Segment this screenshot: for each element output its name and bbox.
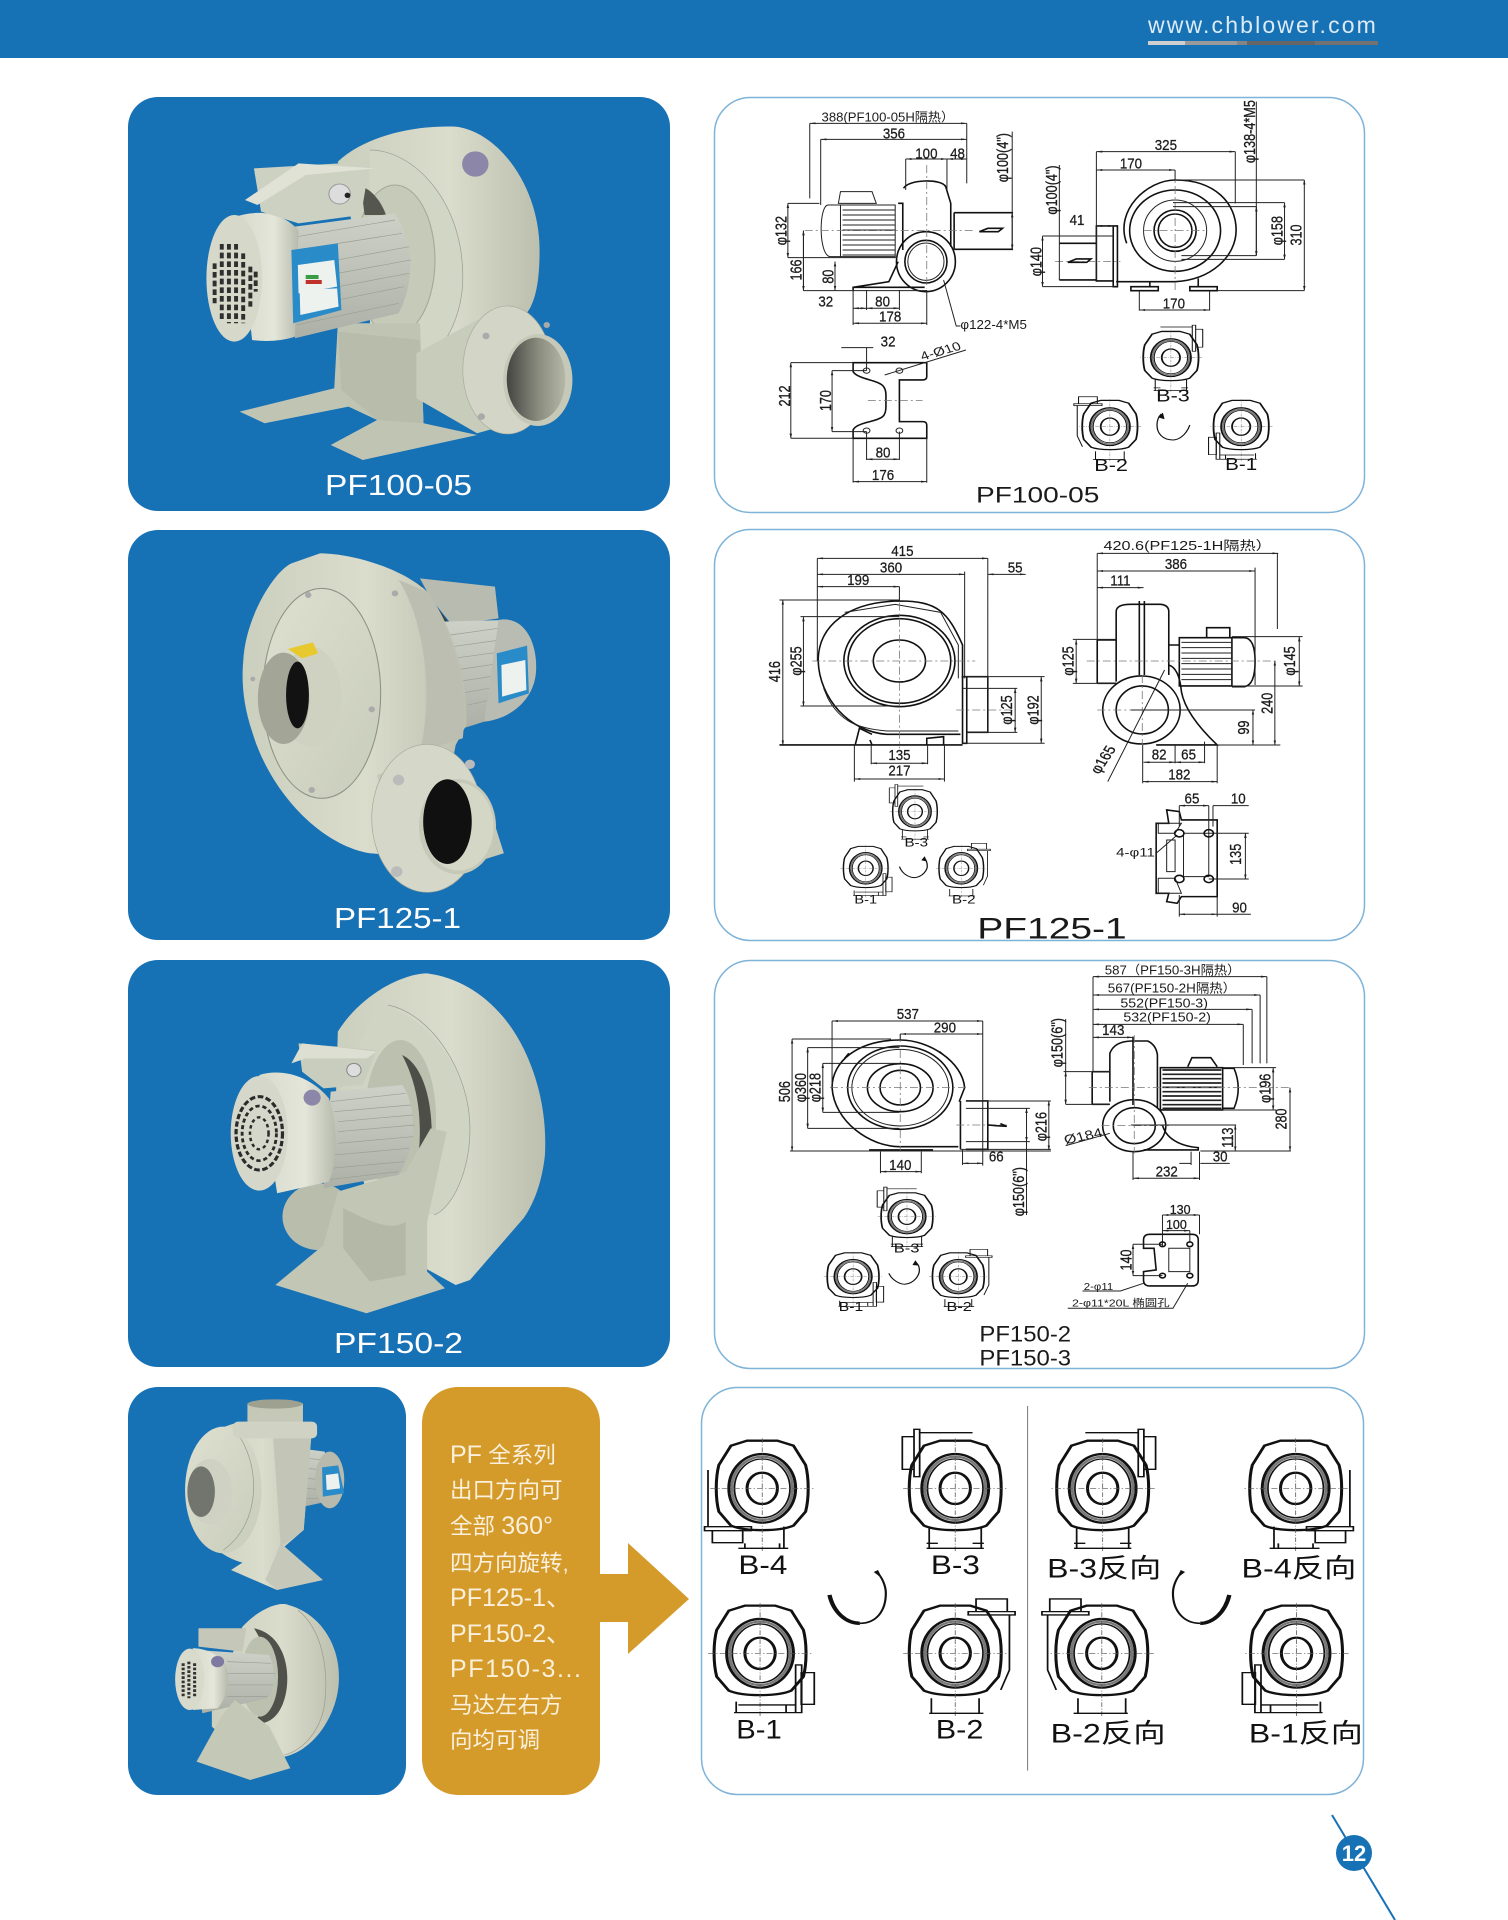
base plate drawing: 170 — [817, 390, 835, 411]
blower photo: outlet up — [185, 1399, 344, 1590]
rotation positions B-1 to B-3: B-2 — [947, 1300, 972, 1314]
front view dimensions: 170 — [1120, 155, 1142, 171]
front view dimensions — [777, 1005, 1051, 1216]
front view dimensions: 360 — [880, 559, 902, 575]
side view dimensions: 388(PF100-05H隔热） — [822, 110, 954, 125]
side view dimensions: 82 — [1152, 746, 1167, 762]
panel: PF125-1 photo — [128, 530, 670, 940]
product name: PF150-2 — [334, 1328, 463, 1360]
base plate drawing — [777, 333, 966, 483]
base plate drawing: 212 — [777, 385, 794, 407]
base plate drawing: 176 — [872, 466, 894, 483]
side view dimensions — [1049, 963, 1291, 1180]
url underline bar — [1148, 41, 1378, 45]
base plate drawing: 140 — [1118, 1249, 1136, 1271]
front view dimensions: φ140 — [1028, 247, 1046, 276]
front view dimensions: φ158 — [1269, 216, 1287, 245]
front view dimensions: 325 — [1155, 136, 1177, 153]
divider — [1027, 1406, 1029, 1771]
front view dimensions: φ255 — [788, 646, 806, 676]
side view dimensions: 232 — [1156, 1163, 1178, 1180]
page number badge: 12 — [1342, 1841, 1366, 1866]
side view dimensions: 356 — [883, 125, 905, 141]
callout text: PF150-3... — [450, 1655, 581, 1683]
base plate drawing: 32 — [881, 333, 896, 350]
side view dimensions — [773, 110, 1027, 332]
rotation positions B-1 to B-3 — [824, 1187, 992, 1314]
front view dimensions: 135 — [888, 746, 911, 763]
standard positions B-1 to B-4: B-4 — [738, 1550, 787, 1580]
side view dimensions: Ø184 — [1062, 1126, 1105, 1148]
panel: PF150 technical drawing — [714, 960, 1364, 1371]
drawing title: PF150-2 — [979, 1322, 1071, 1347]
side view dimensions: 166 — [788, 259, 806, 281]
front view dimensions: 199 — [847, 571, 870, 588]
base plate drawing: 2-φ11 — [1084, 1282, 1113, 1293]
front view dimensions: φ150(6") — [1011, 1167, 1028, 1216]
side view dimensions: 80 — [820, 270, 838, 284]
side view dimensions: 48 — [950, 145, 965, 161]
arrow to rotation diagram — [596, 1543, 689, 1654]
page number badge — [1332, 1815, 1395, 1920]
standard positions B-1 to B-4: B-2 — [936, 1714, 983, 1744]
rotation positions B-1 to B-3: B-3 — [894, 1242, 919, 1256]
drawing title: PF150-3 — [979, 1346, 1071, 1371]
panel: PF100-05 technical drawing — [714, 98, 1364, 512]
standard positions B-1 to B-4 — [705, 1429, 1015, 1744]
side view dimensions: φ145 — [1282, 646, 1299, 676]
side view dimensions: 143 — [1102, 1021, 1125, 1038]
front view dimensions: 290 — [934, 1019, 956, 1035]
side view dimensions — [1060, 539, 1303, 783]
reversed positions: B-1反向 — [1249, 1719, 1363, 1749]
base plate drawing — [1116, 790, 1251, 917]
side view dimensions: φ125 — [1060, 646, 1078, 676]
callout text — [450, 1441, 581, 1753]
side view dimensions: φ122-4*M5 — [960, 318, 1027, 332]
website url: www.chblower.com — [1147, 12, 1378, 38]
rotation positions B-1 to B-3 — [840, 785, 990, 906]
callout text: PF150-2、 — [450, 1620, 571, 1648]
header band — [0, 0, 1508, 58]
panel: gold callout — [422, 1387, 689, 1795]
side view dimensions: 567(PF150-2H隔热） — [1108, 981, 1236, 996]
side view dimensions: φ196 — [1257, 1074, 1275, 1103]
side view dimensions: 99 — [1235, 721, 1253, 735]
front view dimensions — [767, 542, 1045, 782]
base plate drawing: 130 — [1170, 1203, 1191, 1217]
base plate drawing: 80 — [876, 444, 891, 461]
front view dimensions: φ125 — [998, 695, 1016, 725]
front view dimensions — [1028, 100, 1306, 311]
base plate drawing: 10 — [1231, 790, 1246, 806]
front view dimensions: φ360 — [793, 1073, 810, 1102]
panel: PF150-2 photo — [128, 960, 670, 1367]
side view dimensions: 111 — [1110, 572, 1131, 589]
side view dimensions: φ100(4") — [995, 133, 1012, 182]
front view outline — [779, 587, 1013, 748]
front view dimensions: 416 — [767, 661, 784, 682]
side view dimensions: 30 — [1213, 1148, 1228, 1165]
side view dimensions: 32 — [818, 293, 833, 310]
callout text: 向均可调 — [450, 1728, 540, 1753]
front view dimensions: 41 — [1070, 211, 1085, 228]
base plate drawing: 90 — [1232, 899, 1247, 916]
side view dimensions: 552(PF150-3) — [1120, 997, 1208, 1011]
base plate drawing: 4-φ11 — [1116, 846, 1155, 859]
drawing title: PF125-1 — [977, 912, 1127, 945]
side view outline — [1087, 601, 1278, 745]
front view dimensions: φ192 — [1025, 695, 1043, 725]
front view outline — [1055, 170, 1236, 291]
rotation positions B-1 to B-3: B-1 — [839, 1300, 863, 1314]
front view dimensions: 170 — [1163, 295, 1185, 311]
panel: PF100-05 photo — [128, 97, 670, 511]
rotation positions B-1 to B-3: B-2 — [952, 893, 976, 906]
rotation positions B-1 to B-3: B-2 — [1094, 455, 1128, 475]
side view dimensions: φ150(6") — [1049, 1018, 1067, 1067]
side view dimensions: 182 — [1168, 766, 1191, 782]
front view dimensions: φ216 — [1033, 1112, 1051, 1141]
blower photo PF150-2 — [231, 973, 545, 1313]
front view dimensions: φ218 — [807, 1073, 825, 1102]
side view dimensions: 65 — [1181, 746, 1196, 762]
side view dimensions: 100 — [915, 145, 938, 161]
base plate drawing: 65 — [1185, 790, 1200, 806]
rotation positions B-1 to B-3: B-3 — [904, 836, 928, 849]
callout text: 出口方向可 — [450, 1478, 563, 1503]
callout text: 全部 360° — [450, 1512, 553, 1540]
side view dimensions: 587（PF150-3H隔热） — [1105, 963, 1240, 978]
blower photo PF125-1 — [243, 553, 536, 892]
side view dimensions: φ165 — [1087, 744, 1120, 776]
front view dimensions: 310 — [1288, 224, 1306, 246]
front view dimensions: 140 — [889, 1156, 912, 1173]
base plate drawing — [1068, 1203, 1200, 1309]
standard positions B-1 to B-4: B-1 — [736, 1714, 782, 1744]
rotation positions B-1 to B-3: B-1 — [1225, 454, 1257, 474]
base plate drawing: 100 — [1166, 1218, 1187, 1232]
front view dimensions: φ100(4") — [1044, 165, 1062, 215]
rotation positions B-1 to B-3: B-3 — [1156, 386, 1190, 406]
standard positions B-1 to B-4: B-3 — [931, 1550, 980, 1580]
side view dimensions: φ132 — [773, 216, 791, 245]
front view dimensions: 415 — [891, 542, 914, 559]
panel: outlet rotation positions — [702, 1388, 1364, 1794]
front view dimensions: φ138-4*M5 — [1242, 100, 1260, 163]
drawing title — [979, 1322, 1071, 1371]
rotation arrow, standard — [829, 1570, 886, 1623]
side view dimensions: 420.6(PF125-1H隔热） — [1104, 539, 1272, 554]
side view dimensions: 113 — [1220, 1128, 1238, 1148]
front view dimensions: 55 — [1008, 559, 1023, 575]
side view dimensions: 532(PF150-2) — [1123, 1011, 1211, 1025]
panel: two blower photos — [128, 1387, 406, 1795]
drawing title: PF100-05 — [976, 483, 1099, 508]
reversed positions: B-2反向 — [1051, 1719, 1166, 1749]
side view dimensions: 80 — [875, 293, 890, 310]
reversed positions — [1042, 1429, 1363, 1749]
front view dimensions: 537 — [897, 1005, 919, 1022]
base plate drawing: 135 — [1228, 844, 1246, 865]
panel: PF125-1 technical drawing — [714, 530, 1364, 945]
callout text: PF125-1、 — [450, 1584, 571, 1612]
side view dimensions: 240 — [1259, 693, 1277, 714]
side view dimensions: 386 — [1165, 555, 1187, 572]
reversed positions: B-3反向 — [1047, 1553, 1161, 1583]
front view dimensions: 66 — [989, 1148, 1004, 1165]
blower photo PF100-05 — [206, 126, 572, 460]
rotation positions B-1 to B-3: B-1 — [854, 893, 877, 906]
side view outline — [805, 165, 1013, 292]
side view dimensions: 178 — [879, 308, 901, 325]
blower photo: motor front — [175, 1604, 339, 1780]
side view dimensions: 280 — [1273, 1108, 1291, 1130]
front view outline — [830, 1034, 1007, 1152]
rotation arrow, reversed — [1173, 1570, 1229, 1623]
product name: PF125-1 — [334, 903, 461, 935]
front view dimensions: 217 — [888, 762, 911, 779]
callout text: 四方向旋转, — [450, 1551, 569, 1576]
base plate drawing: 2-φ11*20L 椭圆孔 — [1072, 1297, 1170, 1309]
rotation positions B-1 to B-3 — [1074, 325, 1272, 475]
callout text: PF 全系列 — [450, 1441, 556, 1469]
product name: PF100-05 — [325, 470, 472, 502]
reversed positions: B-4反向 — [1241, 1553, 1356, 1583]
front view dimensions: 506 — [777, 1081, 794, 1102]
base plate drawing: 4-Ø10 — [918, 339, 964, 363]
side view outline — [1089, 1035, 1291, 1153]
callout text: 马达左右方 — [450, 1693, 563, 1718]
